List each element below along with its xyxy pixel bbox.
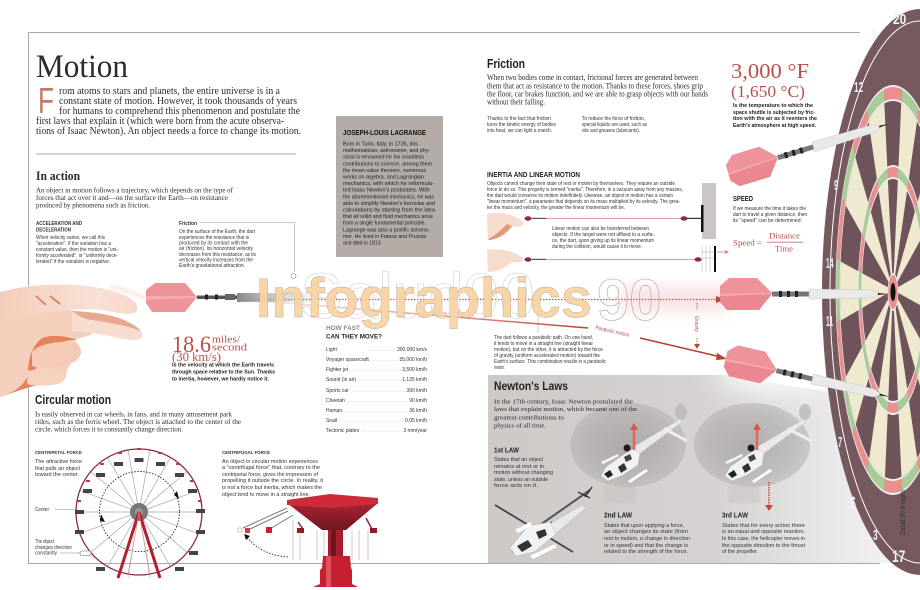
table: how fast can they move [326,325,427,434]
callout: 3,000 degrees F: 3,000 °F [731,59,809,83]
dartboard: 7 [838,433,842,451]
text: friction examples: into heat, we can light a match. [487,128,552,134]
callout: 18.6 miles per second [172,332,275,382]
callout: 18.6 miles per second: through space relative to the Sun. Thanks [172,370,275,376]
panel: Joseph-Louis Lagrange biography: Lagrange was also a prolific astrono- [343,227,430,233]
text: 3rd law: 3rd LAW [722,512,748,520]
panel: Joseph-Louis Lagrange biography: mer. He lived in France and Prussia [343,234,427,240]
text: acceleration and deceleration: When velocity varies, we call this [36,235,105,241]
text: linear motion transfer: objects. If the target were not affixed to a surfa- [552,232,654,238]
helicopter: second law [570,403,688,503]
table: how fast can they move: HOW FAST [326,325,360,332]
text: inertia body: "linear momentum", a parameter that depends on its mass multiplied by its velocity. The grea- [487,199,680,205]
text: inertia body: ter the mass and velocity, the greater the linear momentum will be. [487,205,625,211]
text: centripetal force: toward the center. [35,472,79,478]
text: In action body: An object in motion follows a trajectory, which depends on the type of [36,186,234,194]
text: parabolic path explanation: motion), but on the other, it is attracted by the force [494,347,603,353]
table: how fast can they move: 90 km/h [409,398,427,404]
text: centrifugal force: is not a force but inertia, which makes the [222,485,322,491]
text: centrifugal force: An object in circular motion experiences [222,459,319,465]
text: centripetal force: that pulls an object [35,466,81,472]
text: friction note with leader: air (friction). Its horizontal velocity [179,246,253,252]
panel: Joseph-Louis Lagrange biography: the aforementioned mechanics, he was [343,194,434,200]
text: friction examples: turns the kinetic energy of bodies [487,122,556,128]
text: speed formula: If we measure the time it takes the [733,206,806,212]
text: Circular motion body [35,410,241,434]
text: parabolic path explanation: it tends to move in a straight line (straight linear [494,341,593,347]
text: acceleration and deceleration [36,221,118,265]
dart: top, hitting board [724,108,894,188]
panel: Joseph-Louis Lagrange biography: that all solid and fluid mechanics arise [343,214,433,220]
callout: 18.6 miles per second: 18.6 [172,332,211,357]
text: speed formula: its "speed" can be determined. [733,218,802,224]
intro text block with drop cap: for humans to comprehend this phenomenon and postulate the [59,106,300,117]
text: 2nd law: States that upon applying a force, [604,523,684,529]
callout: 18.6 miles per second: Is the velocity at which the Earth travels [172,362,274,368]
callout: 18.6 miles per second: miles/ [212,334,241,346]
text: friction examples: oils and greases (lubricants). [582,128,640,134]
text: friction note with leader: Earth's gravitational attraction. [179,263,245,269]
text: centrifugal force [222,450,324,498]
panel: Joseph-Louis Lagrange biography: Born in Turin, Italy, in 1736, this [343,142,418,148]
text: centripetal force: CENTRIPETAL FORCE [35,450,82,455]
text: acceleration and deceleration: lerated" if the variation is negative. [36,259,110,265]
table: how fast can they move: Tectonic plates [326,428,360,434]
text: 3rd law: is an equal and opposite reaction. [722,529,805,535]
dartboard: 11 [826,313,833,330]
table: how fast can they move: Sports car [326,388,349,394]
panel: Joseph-Louis Lagrange biography: JOSEPH-LOUIS LAGRANGE [343,130,426,137]
panel: Joseph-Louis Lagrange biography: contributions to science, among them [343,161,432,167]
panel: Joseph-Louis Lagrange biography: ted Isaac Newton's postulates. With [343,188,430,194]
text: friction examples [487,116,647,134]
text: Circular motion body: Is easily observed in car wheels, in fans, and in many amusement park [35,410,232,418]
text: speed formula: dart to travel a given distance, then [733,212,807,218]
helicopter: first law, at rest [495,487,592,559]
callout: 3,000 degrees F: tion with the air as it reenters the [733,116,817,122]
table: how fast can they move: Human [326,408,342,414]
labels: ferris wheel center and direction: The object [35,539,54,545]
text: friction note with leader [179,221,296,278]
labels: ferris wheel center and direction [35,507,91,556]
dartboard: 14 [826,255,834,272]
text: inertia body [487,181,683,211]
table: how fast can they move: Cheetah [326,398,345,404]
text: 1st law: motion without changing [494,470,553,476]
callout: 18.6 miles per second: second [212,342,248,354]
dartboard: 3 [873,526,878,544]
text: parabolic path explanation: The dart follows a parabolic path. On one hand, [494,335,593,341]
text: centrifugal force: centripetal force, gives the impression of [222,472,319,478]
callout: 3,000 degrees F [731,59,817,129]
panel: Joseph-Louis Lagrange biography: able to simplify Newton's formulas and [343,201,435,207]
text: 2nd law: related to the strength of the force. [604,549,688,555]
dartboard: 9 [834,176,838,194]
panel: Joseph-Louis Lagrange biography: works on algebra, and Lagrangian [342,174,424,180]
text: 3rd law [722,512,806,555]
intro text block with drop cap: tions of Isaac Newton). An object needs a force to change its motion. [36,126,301,137]
text: centrifugal force: object tend to move in a straight line. [222,492,310,498]
intro text block with drop cap: first laws that explain it (which were born from the acute observa- [36,116,284,127]
dartboard: 12 [854,78,863,96]
text: 1st law: force acts on it. [494,483,538,489]
text: Newton's Laws intro: greatest contributions to [494,414,564,422]
table: how fast can they move: 36 km/h [409,408,427,414]
text: centripetal force [35,450,82,478]
text: 2nd law: an object changes its state (from [604,529,688,535]
credit: vertical watermark: Salud 90 images [900,490,907,535]
text: parabolic path explanation: of gravity (uniform accelerated motion) toward the [494,353,600,359]
text: speed formula: SPEED [733,196,753,203]
table: how fast can they move: 1,125 km/h [402,377,427,383]
panel: Joseph-Louis Lagrange biography: from a single fundamental principle. [343,221,426,227]
text: acceleration and deceleration: constant value, then the motion is "uni- [36,247,118,253]
text: friction note with leader: Friction [179,221,197,227]
trajectory arrows: straight line, parabola, gravity: Parabolic motion [595,325,630,339]
text: 3rd law: States that for every action there [722,523,805,529]
panel: Joseph-Louis Lagrange biography: mechanics, with which he reformula- [343,181,434,187]
trajectory arrows: straight line, parabola, gravity: Gravity [693,316,699,332]
text: friction note with leader: produced by its contact with the [179,240,248,246]
table: how fast can they move: CAN THEY MOVE? [326,334,382,340]
text: parabolic path explanation [494,335,606,371]
panel: Joseph-Louis Lagrange biography: and died in 1813. [343,240,382,246]
illustration: swing carousel [238,494,378,587]
table: how fast can they move: Voyager spacecraft [326,357,369,363]
text: Newton's Laws intro: In the 17th century, Isaac Newton postulated the [494,398,633,406]
watermark: Salud90 [300,260,535,332]
text: acceleration and deceleration: ACCELERATION AND [36,221,82,227]
text: 1st law: remains at rest or in [494,464,544,470]
watermark: Infographics [256,266,592,329]
intro text block with drop cap [36,80,301,137]
text: 1st law: States that an object [494,457,544,463]
text: acceleration and deceleration: DECELERATION [36,228,71,234]
text: 2nd law [604,512,690,555]
text: Newton's Laws intro: physics of all time. [494,422,546,430]
dartboard: 17 [892,548,905,567]
table: how fast can they move: Sound (in air) [326,377,356,383]
callout: 18.6 miles per second: to inertia, however, we hardly notice it. [172,376,269,382]
dartboard [822,9,920,575]
table: how fast can they move: Light [326,347,337,353]
callout: 3,000 degrees F: space shuttle is subjected by fric- [733,110,815,116]
watermark: 90 [597,268,662,333]
table: how fast can they move: 390 km/h [406,388,427,394]
text: speed formula: Distance [769,232,800,240]
text: Newton's Laws intro [494,398,637,430]
panel: Newton's Laws background [488,375,900,563]
text: speed formula: Speed = [733,238,763,248]
text: Friction body [487,73,708,106]
callout: 18.6 miles per second: (30 km/s) [172,350,221,364]
dartboard: 5 [872,26,877,44]
dart: lower, parabolic [722,343,893,412]
text: friction examples: Thanks to the fact that friction [487,116,551,122]
text: 3rd law: of the propeller. [722,549,758,555]
title: Motion [36,49,128,85]
text: friction note with leader: decreases from this resistance, as its [179,252,256,258]
text: linear motion transfer [552,226,654,250]
text: In action body: forces that act over it and—on the surface the Earth—on resistance [36,194,228,202]
table: how fast can they move: Fighter jet [326,367,349,373]
panel: Joseph-Louis Lagrange biography: sicist is renowned for his countless [343,155,424,161]
text: 1st law [494,448,553,489]
text: acceleration and deceleration: formly accelerated", or "uniformly dece- [36,253,118,259]
panel: Joseph-Louis Lagrange biography [336,116,443,257]
labels: ferris wheel center and direction: Center [35,507,49,513]
text: linear motion transfer: during the collision, would cause it to move. [552,244,642,250]
heading: In action: In action [36,168,81,183]
text: parabolic path explanation: motion. [494,365,505,371]
text: 3rd law: In this case, the helicopter moves in [722,536,805,542]
table: how fast can they move: 300,000 km/s [397,347,427,353]
heading: Newton's Laws: Newton's Laws [494,379,568,393]
diagram: dart hitting a fixed wall [487,183,716,240]
table: how fast can they move: 0.05 km/h [405,418,427,424]
text: Circular motion body: circle, which forces it to constantly change direction. [35,426,183,434]
text: Friction body: without their falling. [487,98,545,106]
intro text block with drop cap: rom atoms to stars and planets, the entire universe is in a [59,86,280,97]
text: In action body [36,186,234,210]
panel: Joseph-Louis Lagrange biography: mathematician, astronomer, and phy- [343,148,430,154]
text: Friction body: the floor, car brakes function, and we are able to grasp objects with our hands [487,90,708,98]
text: centripetal force: The attractive force [35,459,82,465]
table: how fast can they move: 55,000 km/h [399,357,427,363]
panel: Joseph-Louis Lagrange biography: the mean-value theorem, numerous [343,168,426,174]
intro text block with drop cap: constant state of motion. However, it took thousands of years [59,96,297,107]
dartboard: 6 [850,494,856,515]
text: speed formula: Time [775,244,793,254]
text: Friction body: When two bodies come in contact, frictional forces are generated between [487,73,698,82]
text: acceleration and deceleration: "acceleration". If the variation has a [36,241,111,247]
text: centrifugal force: propelling it outside the circle. In reality, it [222,478,324,484]
text: Newton's Laws intro: laws that explain motion, which became one of the [494,406,637,413]
dartboard: 20 [893,11,906,27]
heading: Circular motion: Circular motion [35,392,111,407]
illustration: hand releasing dart [0,284,150,397]
text: 3rd law: the opposite direction to the thrust [722,543,806,549]
panel: Joseph-Louis Lagrange biography: calculations by starting from the idea [343,208,436,214]
heading: Inertia and linear motion: INERTIA AND LINEAR MOTION [487,170,580,179]
text: friction examples: special liquids are used, such as [582,122,647,128]
text: speed formula [733,196,807,254]
heading: Friction: Friction [487,56,525,71]
text: centrifugal force: CENTRIFUGAL FORCE [222,450,270,455]
text: 1st law: 1st LAW [494,448,519,454]
diagram: dart hitting a movable target [487,246,728,272]
text: In action body: produced by phenomena such as friction. [36,202,150,210]
text: Circular motion body: rides, such as the ferris wheel. The object is attached to the center of the [35,418,241,426]
illustration: ferris wheel [75,448,205,578]
intro text block with drop cap: F [38,80,54,121]
labels: ferris wheel center and direction: constantly [35,550,57,556]
text: friction note with leader: On the surface of the Earth, the dart [179,229,256,235]
text: 1st law: state, unless an outside [494,477,548,483]
text: inertia body: the dart would conserve its motion indefinitely. Likewise, an object in motion has a certain [487,193,673,199]
text: 2nd law: 2nd LAW [604,512,632,520]
dart: centre, hitting bullseye [720,278,888,310]
callout: 3,000 degrees F: Earth's atmosphere at high speed. [733,123,816,129]
text: friction examples: To reduce the force of friction, [582,116,645,122]
text: parabolic path explanation: Earth's surface. This combination results in a parabolic [494,359,606,365]
text: Friction body: them that act as resistance to the motion. Thanks to these forces, shoes grip [487,82,703,90]
text: centrifugal force: a "centrifugal force" that, contrary to the [222,465,320,471]
trajectory arrows: straight line, parabola, gravity [237,286,730,360]
text: friction note with leader: vertical velocity increases from the [179,258,253,264]
text: inertia body: Objects cannot change their state of rest or motion by themselves. They require an outside [487,181,675,187]
text: inertia body: force to do so. This property is termed "inertia". Therefore, in a vacuum away from any masses, [487,187,683,193]
soft highlight over panel edge [715,354,835,390]
arrows: thrust and reaction [630,423,773,511]
table: how fast can they move: 3,500 km/h [402,367,427,373]
callout: 3,000 degrees F: (1,650 °C) [731,82,805,101]
text: 2nd law: or in speed) and that the change is [604,543,689,549]
text: 2nd law: rest to motion, a change in direction [604,536,690,542]
dart: in the hand [146,283,327,312]
helicopter: third law [694,403,812,503]
table: how fast can they move: Snail [326,418,337,424]
table: how fast can they move: 3 mm/year [403,428,427,434]
labels: ferris wheel center and direction: changes direction [35,545,72,551]
text: linear motion transfer: ce, the dart, upon giving up its linear momentum [552,238,654,244]
text: linear motion transfer: Linear motion can also be transferred between [552,226,649,232]
callout: 3,000 degrees F: Is the temperature to which the [733,103,813,109]
text: friction note with leader: experiences the resistance that is [179,235,249,241]
